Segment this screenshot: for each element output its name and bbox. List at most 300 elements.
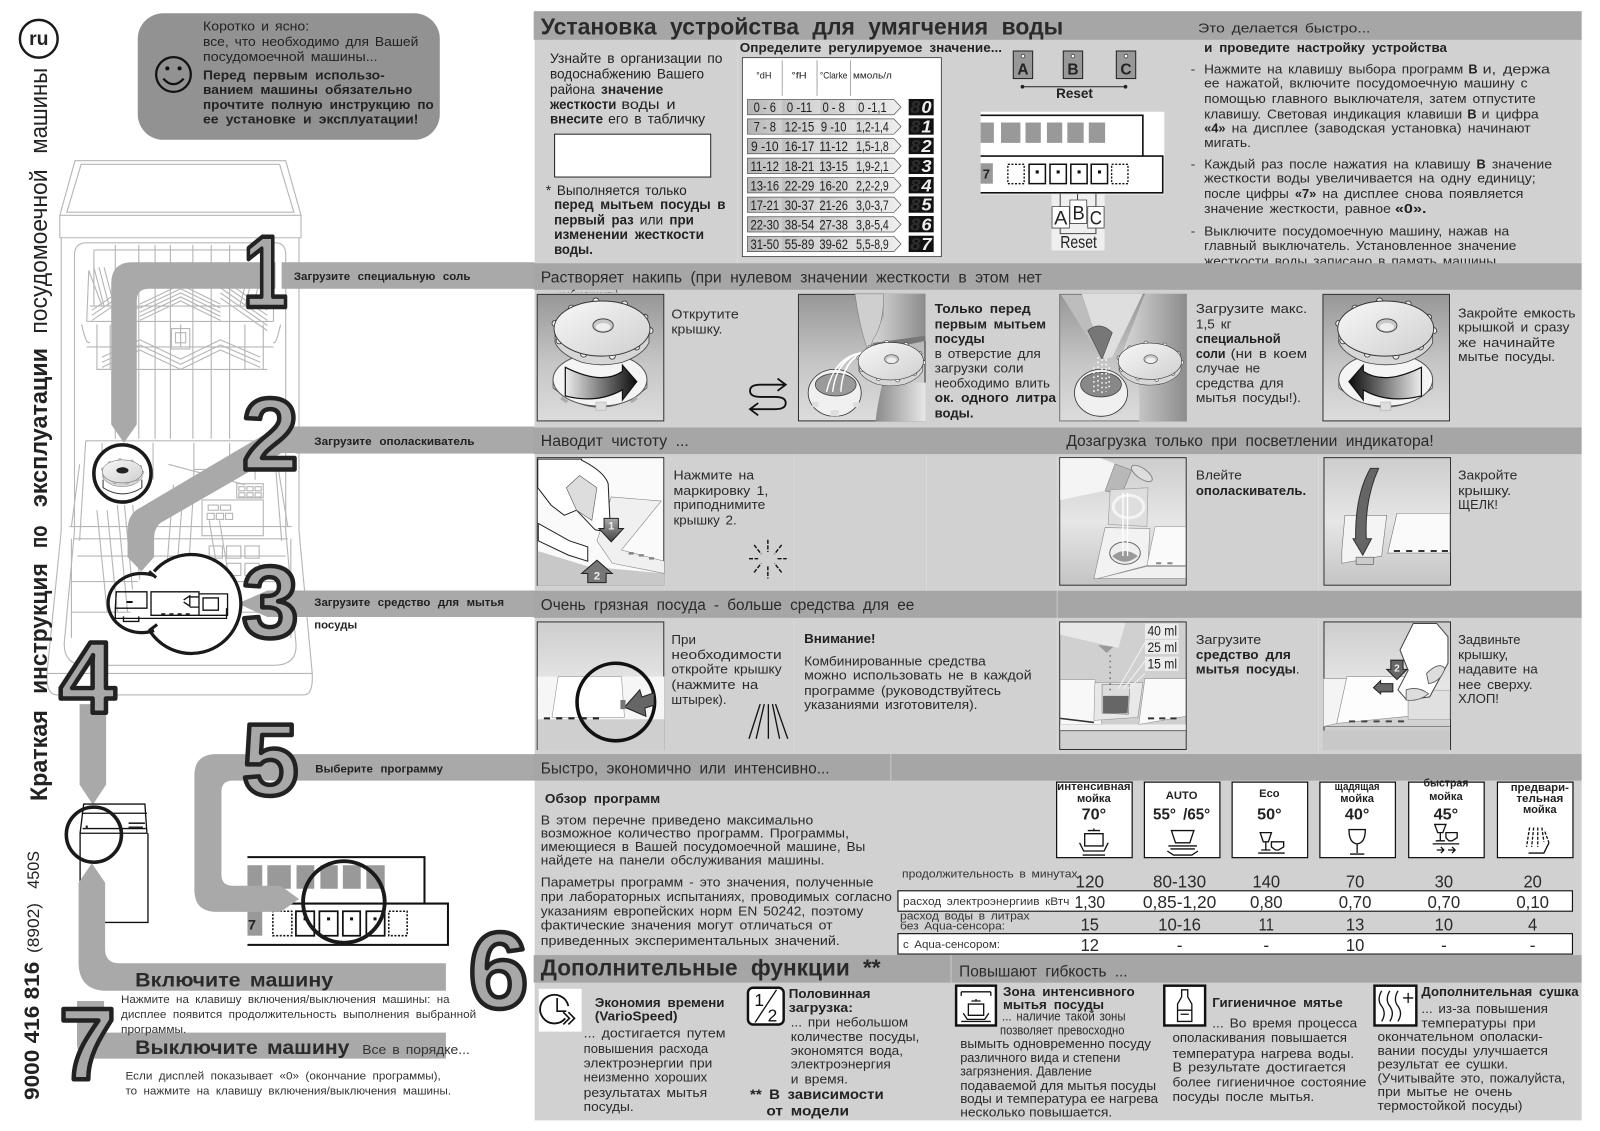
card: quick: быстрая bbox=[1423, 778, 1468, 790]
row 7: 31-50 bbox=[751, 237, 779, 253]
text: load salt: 1,5 кг bbox=[1196, 317, 1232, 332]
heading right: Повышают гибкость ... bbox=[959, 964, 1128, 981]
row: duration: 120 bbox=[1076, 872, 1104, 892]
heading bar bbox=[534, 591, 1582, 618]
row: water with sensor: 10 bbox=[1346, 935, 1364, 955]
row 7: 7 bbox=[921, 234, 933, 254]
step number 5: 5 bbox=[242, 703, 299, 817]
text: programme overview: Параметры программ - это значения, полученные bbox=[541, 875, 873, 890]
card: quick: мойка bbox=[1429, 791, 1464, 803]
text: programme overview: при лабораторных испытаниях, проводимых согласно bbox=[541, 889, 892, 904]
heading text: Очень грязная посуда - больше средства для ее bbox=[541, 597, 914, 614]
row 5 bbox=[747, 195, 934, 215]
text: pour rinse aid: Влейте bbox=[1196, 468, 1242, 483]
section: detergent bbox=[534, 591, 1582, 750]
row: duration: продолжительность в минутах bbox=[902, 869, 1078, 881]
text: intensive zone: Зона интенсивного bbox=[1003, 984, 1135, 999]
text: callout warning: ванием машины обязательно bbox=[203, 82, 412, 97]
row: water with sensor: - bbox=[1441, 935, 1447, 955]
image: open detergent lid bbox=[537, 622, 664, 750]
row 3: 3 bbox=[921, 156, 932, 176]
text: callout warning: прочтите полную инструкцию по bbox=[203, 97, 434, 112]
text: setup steps: - bbox=[1191, 224, 1195, 239]
bar: step 1 label bbox=[282, 262, 535, 289]
section: additional functions bbox=[534, 954, 1582, 1119]
row 6: 27-38 bbox=[819, 217, 848, 233]
text: load detergent bbox=[1196, 632, 1300, 676]
row: water without sensor bbox=[900, 910, 1538, 935]
row 3: 8 bbox=[910, 156, 921, 176]
text: half load: экономятся вода, bbox=[791, 1043, 903, 1058]
icon: hygiene bbox=[1164, 986, 1205, 1025]
background of row bbox=[535, 293, 1582, 428]
row 0: 8 bbox=[910, 97, 921, 117]
text: half load bbox=[789, 986, 919, 1087]
icon: clock bbox=[539, 989, 582, 1032]
text: setup steps: Нажмите на клавишу выбора программ bbox=[1204, 61, 1463, 76]
text: callout intro: Коротко и ясно: bbox=[203, 19, 309, 34]
text: setup steps: и проведите настройку устройства bbox=[1204, 40, 1448, 55]
row: water with sensor: - bbox=[1177, 935, 1182, 955]
text: unscrew cap bbox=[671, 306, 739, 337]
card: intensive: интенсивная bbox=[1057, 781, 1131, 793]
text: attention: можно использовать не в каждой bbox=[804, 668, 1032, 683]
vertical title: Краткая bbox=[26, 710, 53, 801]
row: water without sensor: 15 bbox=[1081, 915, 1099, 935]
text: load detergent: средство для bbox=[1196, 647, 1291, 662]
callout: read the manual bbox=[138, 13, 440, 140]
row 2: 9 -10 bbox=[751, 139, 779, 155]
image: unscrew cap bbox=[537, 294, 664, 421]
text: callout warning: Перед первым использо- bbox=[203, 68, 385, 83]
card: pre-rinse: предвари- bbox=[1511, 782, 1569, 794]
text: intensive zone: позволяет превосходно bbox=[1000, 1023, 1124, 1038]
row: energy: 0,70 bbox=[1339, 892, 1371, 912]
row 0: 0 - 6 bbox=[754, 100, 776, 116]
text: setup steps: на дисплее (заводская установка) начинают bbox=[1232, 121, 1531, 136]
text: setup steps: мигать. bbox=[1204, 135, 1251, 150]
row 1: 1 bbox=[921, 117, 932, 137]
card: intensive bbox=[1057, 781, 1132, 858]
heading text: Растворяет накипь (при нулевом значении жесткости в этом нет bbox=[541, 270, 1042, 287]
row 1: 1,2-1,4 bbox=[856, 120, 889, 136]
text: water hardness: внесите bbox=[550, 111, 603, 126]
text: hygiene: Гигиеничное мятье bbox=[1212, 995, 1343, 1010]
text: setup steps: В bbox=[1468, 61, 1478, 76]
text: half load: Половинная bbox=[789, 986, 870, 1001]
text: time saving: Экономия времени bbox=[595, 995, 724, 1010]
label: step 5: Выберите программу bbox=[315, 763, 443, 775]
step number 3: 3 bbox=[242, 546, 299, 660]
row: energy bbox=[898, 891, 1572, 912]
section: rinse aid bbox=[534, 428, 1582, 586]
table: water hardness bbox=[742, 58, 941, 257]
row 2: 16-17 bbox=[785, 139, 814, 155]
text: callout warning bbox=[203, 68, 434, 126]
text: extra drying: вании посуды улучшается bbox=[1378, 1043, 1548, 1058]
icon: A B C reset keys: B bbox=[1072, 202, 1085, 224]
footnote: depends on model: от модели bbox=[766, 1103, 849, 1118]
heading bar bbox=[534, 955, 1582, 983]
text: extra drying: (Учитывайте это, пожалуйста, bbox=[1378, 1071, 1565, 1086]
row 5: 5 bbox=[921, 195, 932, 215]
row 0: 0 bbox=[921, 97, 932, 117]
row: water with sensor: 12 bbox=[1081, 935, 1099, 955]
text: extra drying: термостойкой посуды) bbox=[1378, 1098, 1522, 1113]
text: open lid hint: необходимости bbox=[671, 647, 782, 662]
icon: smiley bbox=[156, 57, 191, 92]
image: pour rinse aid bbox=[1060, 458, 1186, 585]
text: footnote: изменении жесткости bbox=[554, 227, 704, 242]
row 4: 13-16 bbox=[751, 178, 779, 194]
heading: switch on the machine: Включите машину bbox=[135, 970, 333, 992]
image: open rinse aid lid: 2 bbox=[594, 571, 600, 583]
card: pre-rinse: мойка bbox=[1523, 804, 1558, 816]
image: load detergent bbox=[1060, 622, 1186, 749]
row 4: 22-29 bbox=[785, 178, 814, 194]
text: programme overview: возможное количество программ. Программы, bbox=[541, 826, 849, 841]
text: setup steps: жесткости воды увеличивается на одну единицу; bbox=[1204, 171, 1536, 186]
row 1: 7 - 8 bbox=[754, 120, 776, 136]
text: time saving: повышения расхода bbox=[584, 1041, 709, 1056]
text: switch off instructions: то нажмите на клавишу включения/выключения машины. bbox=[126, 1085, 451, 1097]
text: unscrew cap: крышку. bbox=[671, 322, 722, 337]
text: add water: Только перед bbox=[935, 301, 1031, 316]
text: close lid: Закройте bbox=[1458, 468, 1517, 483]
card: intensive: мойка bbox=[1077, 793, 1112, 805]
text: setup steps: клавишу. Световая индикация клавиши bbox=[1204, 106, 1462, 121]
row: water without sensor: 13 bbox=[1346, 915, 1364, 935]
text: setup steps: «0». bbox=[1395, 201, 1427, 216]
icon: sparkle indicator bbox=[749, 540, 787, 579]
row 3: 13-15 bbox=[819, 159, 848, 175]
text: load salt: (ни в коем bbox=[1231, 346, 1307, 361]
icon: half load: 2 bbox=[768, 1005, 777, 1025]
text: close cap bbox=[1458, 305, 1576, 364]
text: attention: программе (руководствуйтесь bbox=[804, 683, 1001, 698]
text: add water: в отверстие для bbox=[935, 346, 1041, 361]
illustration: dishwasher bbox=[47, 161, 312, 695]
text: add water bbox=[935, 301, 1057, 420]
row: energy: 0,10 bbox=[1516, 892, 1549, 912]
text: close lid: крышку. bbox=[1458, 483, 1511, 498]
text: slide lid: Задвиньте bbox=[1458, 632, 1520, 647]
card: pre-rinse bbox=[1497, 782, 1573, 858]
text: all done: Все в порядке... bbox=[362, 1042, 470, 1057]
bar: load detergent heading arrow bbox=[238, 590, 535, 617]
icon: fill and return arrows bbox=[750, 379, 786, 415]
row 6: 6 bbox=[921, 214, 932, 234]
row 1: 12-15 bbox=[785, 120, 814, 136]
text: half load: ... при небольшом bbox=[791, 1015, 908, 1030]
text: hygiene: более гигиеничное состояние bbox=[1172, 1075, 1366, 1090]
row 2: 11-12 bbox=[819, 139, 848, 155]
row: water without sensor: без Aqua-сенсора: bbox=[900, 921, 1005, 933]
row: energy: расход электроэнергиив кВтч bbox=[903, 896, 1069, 908]
bar: step 2 label: Загрузите ополаскиватель bbox=[314, 436, 475, 448]
icon: buttons A B C with reset: B bbox=[1067, 61, 1079, 78]
image: open rinse aid lid: 1 bbox=[608, 521, 614, 533]
icon: small dishwasher bbox=[66, 804, 148, 922]
text: setup steps: ее нажатой, включите посудомоечную машину с bbox=[1204, 76, 1528, 91]
text: setup steps: значение жесткости, равное bbox=[1204, 201, 1391, 216]
row: duration: 80-130 bbox=[1153, 872, 1206, 892]
text: switch on instructions: Нажмите на клавишу включения/выключения машины: на bbox=[121, 994, 450, 1006]
row 1 bbox=[747, 117, 934, 137]
text: time saving: неизменно хороших bbox=[584, 1070, 708, 1085]
row 4: 16-20 bbox=[819, 178, 848, 194]
text: close lid: ЩЕЛК! bbox=[1458, 497, 1498, 512]
row 2: 8 bbox=[910, 136, 921, 156]
text: slide lid: крышку, bbox=[1458, 647, 1508, 662]
illustration: control panel step 5 bbox=[247, 857, 448, 945]
card: gentle bbox=[1320, 781, 1395, 858]
text: load detergent: . bbox=[1296, 661, 1300, 676]
table: water hardness: °dH bbox=[756, 71, 771, 81]
row: duration: 140 bbox=[1253, 872, 1280, 892]
bar: step 2 label bbox=[296, 427, 535, 454]
row: water with sensor: - bbox=[1263, 935, 1269, 955]
text: slide lid: надавите на bbox=[1458, 661, 1538, 676]
text: water hardness: воды и bbox=[621, 97, 676, 112]
text: water hardness: жесткости bbox=[549, 97, 616, 112]
text: quick note: Это делается быстро... bbox=[1198, 21, 1370, 36]
table: water hardness: °Clarke bbox=[820, 71, 847, 81]
text: attention: Комбинированные средства bbox=[804, 653, 986, 668]
row 7: 39-62 bbox=[819, 237, 848, 253]
icon: language badge bbox=[20, 20, 58, 58]
row 2: 1,5-1,8 bbox=[856, 139, 889, 155]
text: add water: воды. bbox=[935, 405, 973, 420]
text: setup steps: значение bbox=[1492, 156, 1552, 171]
icon: buttons A B C with reset: Reset bbox=[1056, 86, 1093, 102]
text: open lid bbox=[673, 468, 768, 527]
text: setup steps: и, держа bbox=[1483, 61, 1551, 76]
section: programmes bbox=[534, 754, 1582, 955]
text: callout warning: ее установке и эксплуатации! bbox=[203, 111, 418, 126]
row: duration: 30 bbox=[1435, 872, 1453, 892]
text: switch on instructions bbox=[121, 994, 476, 1036]
text: time saving: (VarioSpeed) bbox=[595, 1008, 678, 1023]
text: attention: указаниями изготовителя). bbox=[804, 697, 978, 712]
text: load salt: средства для bbox=[1196, 376, 1284, 391]
card: gentle: мойка bbox=[1340, 793, 1375, 805]
arrow: step 5 select program bbox=[194, 754, 535, 912]
row 3: 11-12 bbox=[751, 159, 779, 175]
subheading: determine value: Определите регулируемое значение... bbox=[740, 40, 1002, 55]
vertical document number: 450S bbox=[25, 851, 43, 889]
row 1: 9 -10 bbox=[821, 120, 846, 136]
arrow: step 1 to salt container bbox=[111, 262, 276, 443]
text: water hardness: Узнайте в организации по bbox=[550, 51, 723, 66]
icon: intensive zone bbox=[956, 986, 996, 1025]
row 0: 0 -1,1 bbox=[858, 100, 887, 116]
step number 7: 7 bbox=[59, 988, 116, 1102]
text: water hardness: значение bbox=[601, 82, 664, 97]
row: water without sensor: 11 bbox=[1259, 915, 1274, 935]
row 1: 8 bbox=[910, 117, 921, 137]
bar: step 1 label: Загрузите специальную соль bbox=[294, 271, 471, 283]
text: add water: посуды bbox=[935, 331, 985, 346]
vertical title: машины bbox=[26, 68, 53, 154]
text: switch off instructions: Если дисплей показывает «0» (окончание программы), bbox=[126, 1071, 441, 1083]
section: water softener setup bbox=[534, 11, 1582, 268]
row 3: 1,9-2,1 bbox=[856, 159, 889, 175]
label: step 3: посуды bbox=[314, 620, 357, 632]
text: add water: загрузки соли bbox=[935, 360, 1023, 375]
icon: A B C reset keys: Reset bbox=[1060, 232, 1097, 252]
vertical title: инструкция bbox=[26, 563, 53, 694]
text: programme overview: фактические значения могут отличаться от bbox=[541, 918, 833, 933]
text: programme overview: Обзор программ bbox=[545, 791, 660, 806]
text: footnote bbox=[546, 183, 726, 257]
step number 2: 2 bbox=[242, 377, 299, 491]
text: open lid: Нажмите на bbox=[673, 468, 755, 483]
text: open lid: крышку 2. bbox=[673, 512, 737, 527]
row: energy: 0,70 bbox=[1428, 892, 1460, 912]
row 7: 55-89 bbox=[785, 237, 814, 253]
icon: A B C reset keys: C bbox=[1090, 207, 1102, 229]
text: programme overview: приведенных экспериментальных значений. bbox=[541, 933, 840, 948]
text: extra drying: при мытье не очень bbox=[1378, 1084, 1512, 1099]
text: switch off instructions bbox=[126, 1071, 451, 1097]
text: hygiene: посуды после мытья. bbox=[1172, 1089, 1314, 1104]
row 6: 38-54 bbox=[785, 217, 814, 233]
row: energy: 0,80 bbox=[1250, 892, 1283, 912]
text: time saving: электроэнергии при bbox=[584, 1055, 712, 1070]
icon: half load: 1 bbox=[754, 990, 764, 1010]
text: water hardness bbox=[549, 51, 723, 126]
row: energy: 1,30 bbox=[1074, 892, 1105, 912]
row 0: 0 -11 bbox=[787, 100, 812, 116]
text: intensive zone: мытья посуды bbox=[1003, 997, 1104, 1012]
label: step 3: Загрузите средство для мытья bbox=[314, 597, 504, 609]
vertical title: эксплуатации bbox=[26, 348, 53, 507]
row 5: 8 bbox=[910, 195, 921, 215]
text: setup steps: главный выключатель. Установленное значение bbox=[1204, 238, 1516, 253]
heading bar bbox=[534, 428, 1582, 454]
text: programme overview: В этом перечне приведено максимально bbox=[541, 812, 813, 827]
step number 4: 4 bbox=[59, 621, 116, 735]
row: water with sensor: с Aqua-сенсором: bbox=[903, 939, 1000, 951]
text: add water: первым мытьем bbox=[935, 317, 1046, 332]
row 5: 17-21 bbox=[751, 198, 779, 214]
icon: dispenser circles bbox=[108, 554, 241, 653]
text: callout intro: посудомоечной машины... bbox=[203, 49, 378, 64]
card: auto bbox=[1144, 782, 1220, 858]
text: add water: ок. одного литра bbox=[935, 390, 1057, 405]
image: load salt bbox=[1060, 294, 1187, 421]
label: step 3 bbox=[314, 597, 504, 632]
card: gentle: щадящая bbox=[1335, 781, 1380, 793]
footnote: depends on model bbox=[750, 1087, 884, 1118]
text: time saving: результатах мытья bbox=[584, 1085, 707, 1100]
heading text right: Дозагрузка только при посветлении индикатора! bbox=[1066, 433, 1434, 450]
heading bar bbox=[534, 11, 1582, 40]
row 6: 8 bbox=[910, 214, 921, 234]
text: water hardness: водоснабжению Вашего bbox=[550, 67, 704, 82]
card: auto: 55° /65° bbox=[1153, 806, 1210, 823]
text: intensive zone: несколько повышается. bbox=[960, 1104, 1112, 1119]
text: open lid: приподнимите bbox=[673, 497, 765, 512]
text: hygiene: температура нагрева воды. bbox=[1172, 1046, 1354, 1061]
text: close cap: мытье посуды. bbox=[1458, 349, 1555, 364]
text: open lid hint bbox=[671, 632, 782, 707]
text: programme overview bbox=[541, 791, 892, 948]
arrow: step 2 to rinse aid dispenser bbox=[128, 427, 306, 571]
arrow: switch on machine bbox=[79, 863, 446, 991]
row: duration: 70 bbox=[1346, 872, 1364, 892]
image: pour water bbox=[798, 294, 926, 421]
text: water hardness: его в табличку bbox=[608, 111, 705, 126]
text: extra drying: окончательном ополаски- bbox=[1378, 1029, 1543, 1044]
text: attention bbox=[804, 631, 1032, 712]
vertical document number bbox=[20, 851, 44, 1100]
heading bar bbox=[534, 263, 1582, 290]
text: slide lid bbox=[1458, 632, 1538, 706]
row 5: 3,0-3,7 bbox=[856, 198, 889, 214]
text: hygiene: ополаскивания повышается bbox=[1172, 1030, 1347, 1045]
icon: buttons A B C with reset: C bbox=[1120, 61, 1132, 78]
text: open lid hint: (нажмите на bbox=[671, 677, 759, 692]
text: setup steps: «7» bbox=[1295, 186, 1316, 201]
row 0: 0 - 8 bbox=[822, 100, 845, 116]
text: callout intro bbox=[203, 19, 418, 64]
step number 1: 1 bbox=[243, 215, 288, 329]
text: setup steps: на дисплее снова появляется bbox=[1322, 186, 1523, 201]
step number 6: 6 bbox=[468, 910, 529, 1031]
illustration: control panel: 7 bbox=[983, 167, 990, 182]
arrow: switch off band bbox=[77, 1001, 446, 1059]
text: callout intro: все, что необходимо для Вашей bbox=[203, 34, 418, 49]
row 7: 8 bbox=[910, 234, 921, 254]
text: close cap: же начинайте bbox=[1458, 335, 1555, 350]
text: setup steps: помощью главного выключателя, затем отпустите bbox=[1204, 91, 1536, 106]
text: setup steps: - bbox=[1191, 61, 1195, 76]
text: extra drying: температуры при bbox=[1421, 1016, 1536, 1031]
heading text left: Наводит чистоту ... bbox=[541, 433, 689, 450]
text: setup steps: Выключите посудомоечную машину, нажав на bbox=[1204, 224, 1510, 239]
illustration: control panel step 5: 7 bbox=[248, 918, 256, 934]
panel: main right column bbox=[534, 11, 1582, 1120]
card: eco: Eco bbox=[1259, 788, 1280, 800]
row 4: 4 bbox=[920, 175, 932, 195]
card: auto: AUTO bbox=[1166, 790, 1197, 802]
row 2 bbox=[747, 136, 934, 156]
illustration: control panel bbox=[981, 112, 1164, 194]
row 5: 30-37 bbox=[785, 198, 814, 214]
heading text: Быстро, экономично или интенсивно... bbox=[541, 760, 830, 777]
text: programme overview: имеющиеся в Вашей посудомоечной машине, Вы bbox=[541, 839, 865, 854]
text: close cap: крышкой и сразу bbox=[1458, 320, 1570, 335]
row 7: 5,5-8,9 bbox=[856, 237, 889, 253]
text: close lid bbox=[1458, 468, 1517, 512]
icon: program selection circle bbox=[303, 861, 385, 943]
text: extra drying: Дополнительная сушка bbox=[1421, 984, 1580, 999]
image: close cap bbox=[1323, 294, 1449, 421]
text: setup steps: Каждый раз после нажатия на клавишу bbox=[1204, 156, 1471, 171]
text: load salt: специальной bbox=[1196, 331, 1281, 346]
blank input box bbox=[555, 134, 711, 177]
footnote: depends on model: ** В зависимости bbox=[750, 1087, 884, 1102]
text: load salt: случае не bbox=[1196, 360, 1260, 375]
card: eco: 50° bbox=[1257, 806, 1282, 823]
row: water without sensor: 4 bbox=[1528, 915, 1538, 935]
row 3: 18-21 bbox=[785, 159, 814, 175]
text: setup steps: жесткости воды записано в память машины. bbox=[1204, 253, 1500, 268]
vertical title: посудомоечной bbox=[26, 169, 53, 334]
text: footnote: перед мытьем посуды в bbox=[554, 197, 726, 212]
